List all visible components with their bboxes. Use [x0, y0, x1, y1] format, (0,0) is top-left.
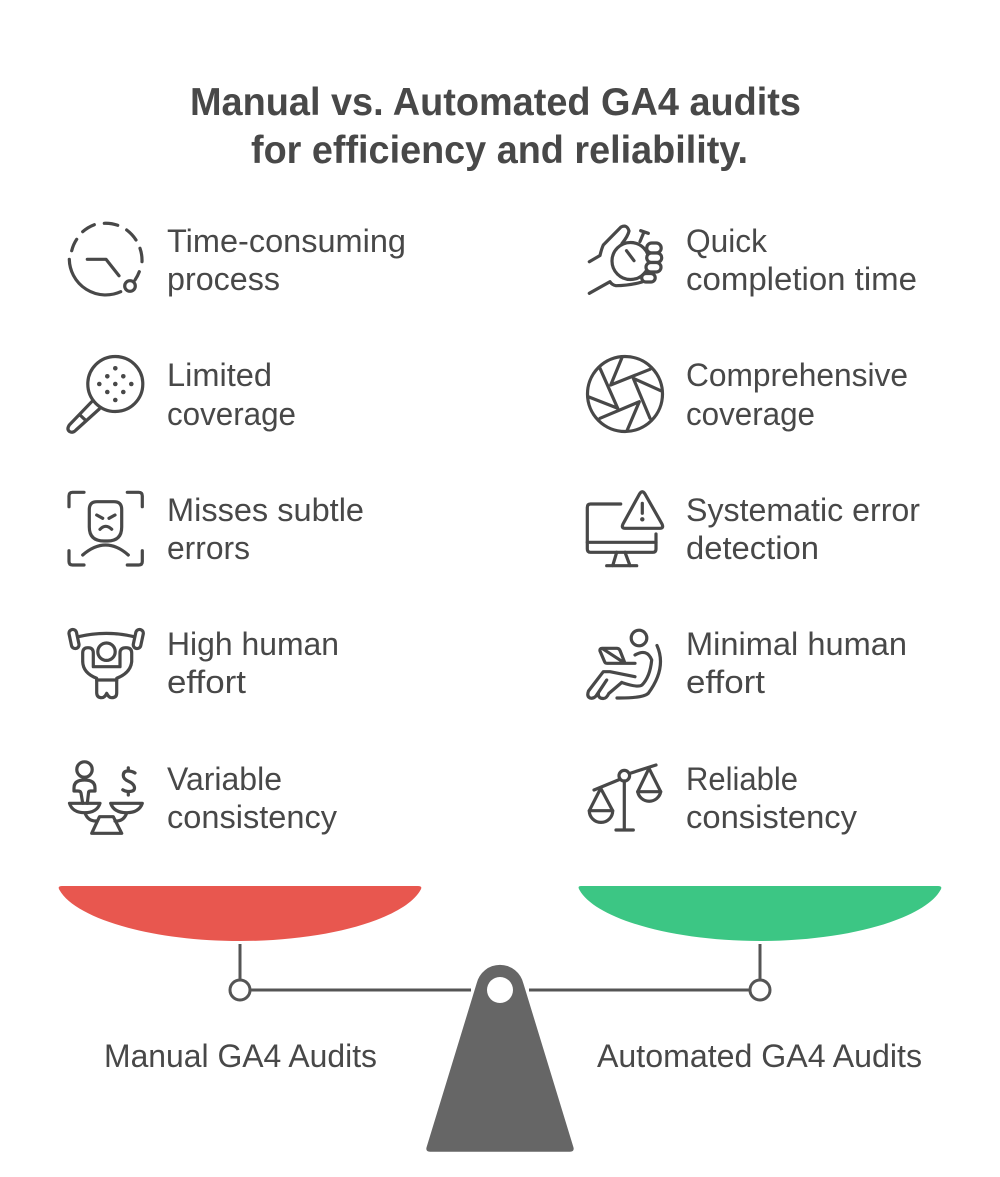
- text: reliable consistency: consistency: [686, 799, 857, 835]
- icon: magnifier with dots: [68, 356, 143, 432]
- text: minimal human effort: Minimal human: [686, 626, 907, 662]
- seesaw: left arm: [230, 944, 471, 1000]
- text: variable consistency: Variable: [167, 761, 282, 797]
- icon: relaxed person with laptop: [588, 630, 660, 698]
- text: high human effort: effort: [167, 664, 246, 700]
- title: for efficiency and reliability.: [251, 129, 748, 172]
- text: misses subtle errors: [167, 492, 364, 566]
- text: minimal human effort: effort: [686, 664, 765, 700]
- text: time-consuming process: [167, 223, 406, 297]
- title: Manual vs. Automated GA4 audits: [190, 81, 801, 124]
- text: systematic error detection: [686, 492, 920, 566]
- text: quick completion time: completion time: [686, 261, 917, 297]
- text: time-consuming process: process: [167, 261, 280, 297]
- icon: aperture: [588, 356, 662, 432]
- text: limited coverage: coverage: [167, 396, 296, 432]
- text: variable consistency: [167, 761, 337, 835]
- icon: dashed clock: [69, 223, 142, 295]
- icon: weightlifter: [68, 629, 144, 698]
- text: time-consuming process: Time-consuming: [167, 223, 406, 259]
- text: reliable consistency: Reliable: [686, 761, 798, 797]
- icon: monitor with warning: [587, 492, 663, 566]
- text: high human effort: High human: [167, 626, 339, 662]
- text: systematic error detection: detection: [686, 530, 819, 566]
- panel: manual GA4 audit traits: [68, 223, 406, 835]
- text: quick completion time: [686, 223, 917, 297]
- text: minimal human effort: [686, 626, 907, 700]
- text: quick completion time: Quick: [686, 223, 768, 259]
- seesaw: right arm: [529, 944, 770, 1000]
- seesaw: fulcrum: [426, 965, 574, 1152]
- text: systematic error detection: Systematic error: [686, 492, 920, 528]
- label: automated GA4 audits: Automated GA4 Audits: [597, 1038, 922, 1074]
- icon: hand holding stopwatch: [589, 226, 662, 293]
- title: [190, 81, 801, 172]
- text: limited coverage: [167, 357, 296, 432]
- icon: frowning face in frame: [69, 492, 142, 565]
- text: variable consistency: consistency: [167, 799, 337, 835]
- icon: balanced scales: [589, 765, 661, 830]
- text: misses subtle errors: errors: [167, 530, 250, 566]
- icon: person and dollar on scale: [70, 762, 142, 833]
- text: comprehensive coverage: [686, 357, 908, 432]
- panel: automated GA4 audit traits: [587, 223, 920, 835]
- seesaw: right green pan: [579, 886, 941, 941]
- label: manual GA4 audits: Manual GA4 Audits: [104, 1038, 377, 1074]
- text: misses subtle errors: Misses subtle: [167, 492, 364, 528]
- text: limited coverage: Limited: [167, 357, 272, 393]
- text: comprehensive coverage: coverage: [686, 396, 815, 432]
- text: reliable consistency: [686, 761, 857, 835]
- text: comprehensive coverage: Comprehensive: [686, 357, 908, 393]
- seesaw: left red pan: [59, 886, 421, 941]
- text: high human effort: [167, 626, 339, 700]
